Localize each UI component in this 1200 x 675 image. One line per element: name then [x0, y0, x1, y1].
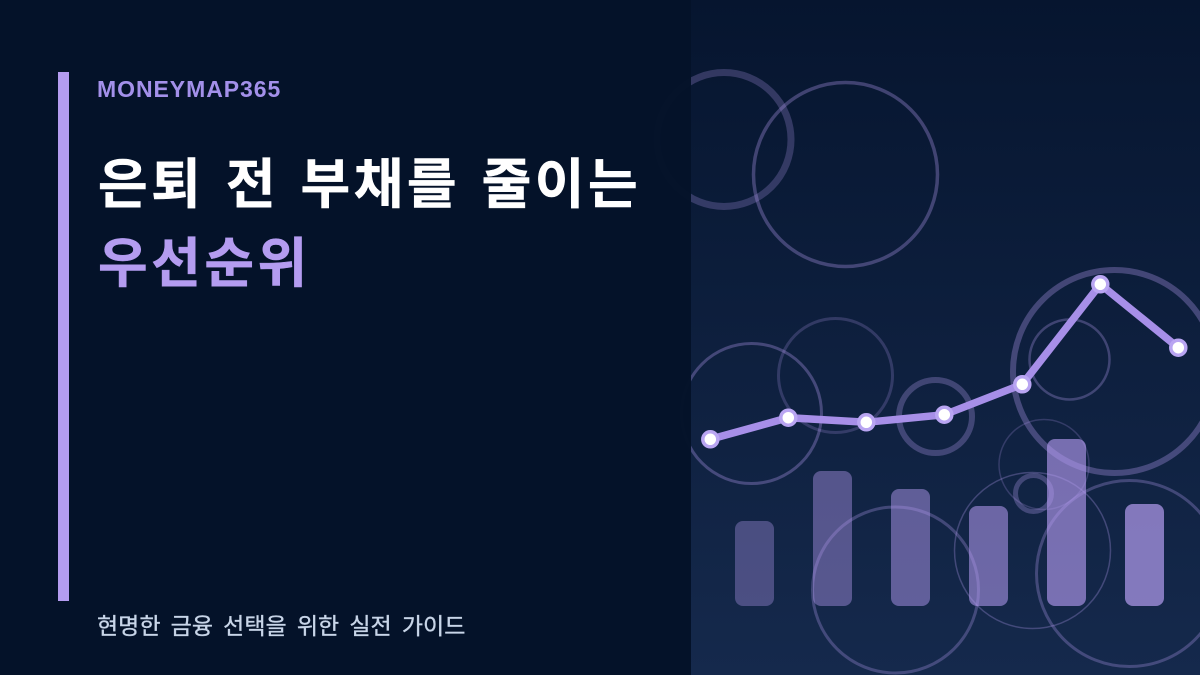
brand label: MONEYMAP365 — [97, 76, 281, 102]
title — [98, 155, 641, 294]
accent bar — [58, 72, 69, 601]
line chart — [703, 277, 1186, 447]
bar chart — [735, 439, 1164, 606]
title: 우선순위 — [98, 234, 311, 294]
left text panel — [0, 0, 691, 675]
title: 은퇴 전 부채를 줄이는 — [98, 155, 641, 215]
subtitle: 현명한 금융 선택을 위한 실전 가이드 — [97, 613, 465, 639]
